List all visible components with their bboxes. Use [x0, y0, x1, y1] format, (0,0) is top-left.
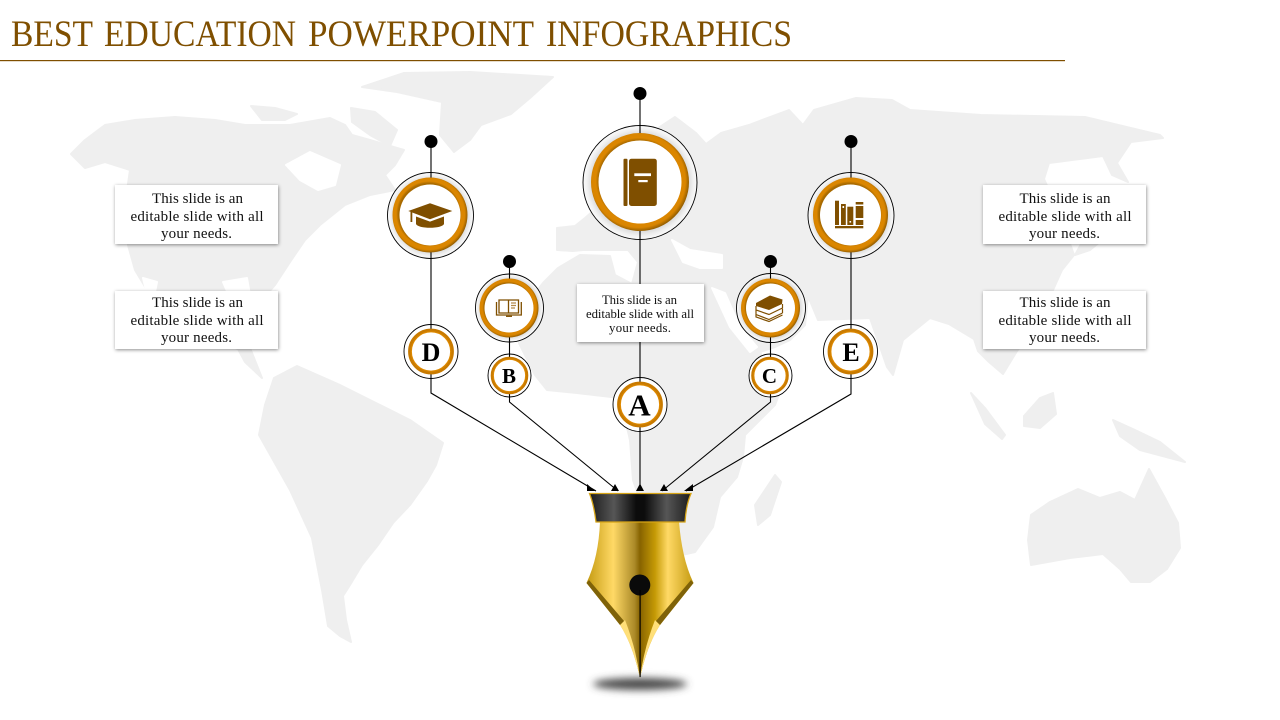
connector B: [510, 261, 618, 491]
text box: center: This slide is an: [602, 293, 678, 307]
arrowheads: [587, 484, 693, 491]
text box: top right: your needs.: [1029, 226, 1100, 242]
letter badge D: [404, 324, 458, 379]
map: inland seas: [143, 152, 757, 352]
icon: open book: [496, 300, 521, 316]
big circle D with graduation cap icon: [388, 172, 474, 258]
connector A: [639, 93, 641, 491]
world map background: [71, 72, 1185, 642]
text box: bottom right: [983, 291, 1146, 349]
letter badge C: C: [762, 364, 777, 388]
letter badge C: [749, 354, 792, 397]
icon: graduation cap: [408, 203, 452, 228]
letter badge B: [488, 354, 531, 397]
map: North America: [71, 117, 404, 378]
letter badge E: [824, 324, 878, 379]
letter badge A: [613, 377, 667, 432]
dot C: [764, 255, 777, 268]
pen collar: [590, 494, 691, 522]
letter badge E: E: [842, 338, 860, 367]
map: Greenland: [362, 72, 553, 152]
icon: bookshelf: [835, 201, 863, 228]
big circle C with book stack icon: [736, 273, 806, 343]
text box: top right: editable slide with all: [998, 209, 1132, 225]
text box: top left: This slide is an: [152, 191, 244, 207]
nib tip highlight: [620, 620, 660, 678]
text box: bottom left: your needs.: [161, 330, 232, 346]
text box: top left: editable slide with all: [130, 209, 264, 225]
nib slit: [640, 590, 641, 677]
map: Madagascar: [755, 475, 781, 525]
big circle B with open book icon: [476, 273, 544, 343]
dot B: [503, 255, 516, 268]
text box: top right: [983, 185, 1146, 244]
title: EDUCATION: [104, 14, 296, 55]
text box: bottom left: This slide is an: [152, 295, 244, 311]
title: BEST: [11, 14, 93, 55]
letter badge A: A: [628, 388, 651, 422]
text box: top left: [115, 185, 278, 244]
text box: center: editable slide with all: [586, 307, 694, 321]
big circle E with bookshelf icon: [808, 172, 894, 258]
connector D: [431, 141, 596, 491]
map: Eurasia and Africa: [519, 98, 1163, 560]
map: South America: [259, 366, 443, 642]
icon: book stack: [756, 296, 782, 322]
top dots: [424, 87, 858, 268]
connector E: [686, 141, 851, 491]
nib body: [586, 522, 694, 678]
text box: bottom left: editable slide with all: [130, 313, 264, 329]
map: Japan: [1075, 190, 1122, 255]
title: INFOGRAPHICS: [546, 14, 792, 55]
connector C: [662, 261, 770, 491]
pen nib illustration: [586, 494, 694, 690]
title: [11, 14, 792, 55]
text box: top right: This slide is an: [1020, 191, 1111, 207]
text box: center: [577, 284, 704, 342]
nib breather hole: [629, 574, 650, 596]
text box: top left: your needs.: [161, 226, 232, 242]
connector lines: [431, 93, 851, 491]
nib edge shading: [586, 580, 694, 625]
text box: bottom right: editable slide with all: [998, 313, 1132, 329]
map: Australia: [1028, 469, 1180, 582]
letter badge B: B: [502, 364, 516, 388]
text box: bottom left: [115, 291, 278, 349]
pen shadow: [593, 678, 687, 690]
dot D: [424, 135, 438, 148]
title: POWERPOINT: [308, 14, 534, 55]
text box: center: your needs.: [609, 321, 671, 335]
map: arctic islands: [251, 106, 397, 146]
map: Indonesia islands: [971, 393, 1185, 462]
big circle A with notebook icon: [583, 125, 697, 240]
text box: bottom right: This slide is an: [1020, 295, 1111, 311]
title underline: [0, 60, 1065, 61]
dot A: [634, 87, 646, 100]
dot E: [844, 135, 858, 148]
text box: bottom right: your needs.: [1029, 330, 1100, 346]
icon: notebook: [624, 159, 657, 206]
letter badge D: D: [422, 338, 440, 367]
